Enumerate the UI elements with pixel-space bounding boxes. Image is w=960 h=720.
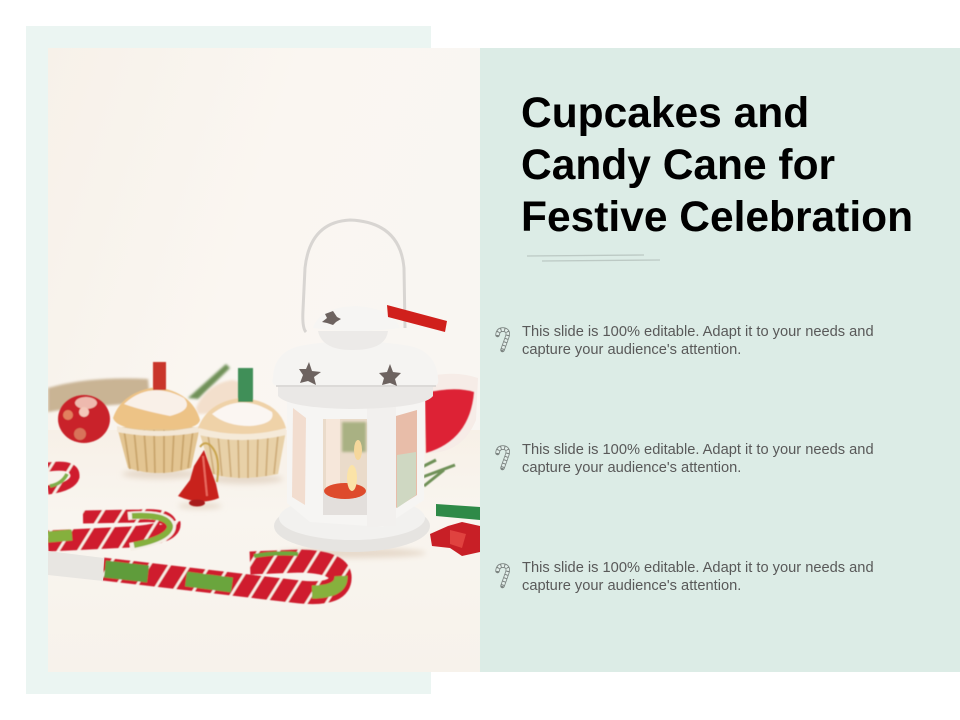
right cupcake — [198, 368, 286, 478]
lantern handle — [303, 220, 405, 332]
lantern base — [274, 500, 430, 552]
photo: lantern, cupcakes and candy canes — [48, 48, 480, 672]
red star bow — [430, 522, 480, 556]
left cupcake — [113, 362, 200, 473]
title — [521, 90, 913, 241]
body text: capture your audience's attention. — [522, 578, 741, 594]
star right — [379, 364, 401, 386]
body text — [522, 560, 874, 594]
icon: candy cane — [495, 563, 510, 588]
title: Cupcakes and — [521, 90, 809, 137]
red bauble — [58, 395, 110, 443]
body text: This slide is 100% editable. Adapt it to your needs and — [522, 442, 874, 458]
red tree ornament — [178, 443, 219, 506]
body text — [522, 442, 874, 476]
lantern lower cap — [278, 384, 433, 409]
star left — [299, 362, 321, 385]
icon: candy cane — [495, 445, 510, 470]
photo table surface — [48, 430, 480, 672]
green sprig by lantern — [420, 460, 455, 486]
photo background wall — [48, 48, 480, 448]
red clothespin — [387, 305, 447, 332]
candy wrapper label — [48, 551, 104, 581]
text item 1 — [495, 324, 874, 358]
lantern — [272, 220, 447, 552]
title: Candy Cane for — [521, 142, 835, 189]
icon: candy cane — [495, 327, 510, 352]
rear blurred cupcake — [196, 380, 250, 414]
lantern top cap — [313, 306, 400, 350]
text item 2 — [495, 442, 874, 476]
text item 3 — [495, 560, 874, 594]
candle — [324, 483, 366, 499]
left window — [292, 408, 306, 505]
red drink glass — [425, 374, 478, 453]
body text — [522, 324, 874, 358]
twine — [48, 378, 150, 412]
panel: pale backing block — [26, 26, 431, 694]
title underline strokes — [527, 254, 660, 262]
center window — [323, 419, 367, 515]
candy cane: long front — [103, 553, 341, 593]
lantern dome — [272, 341, 438, 387]
green clothespin — [436, 504, 480, 520]
table shadows — [122, 469, 426, 558]
green sprig — [188, 364, 230, 399]
body text: capture your audience's attention. — [522, 460, 741, 476]
candy cane: middle — [48, 515, 172, 547]
lantern body — [287, 400, 425, 527]
body text: This slide is 100% editable. Adapt it to your needs and — [522, 560, 874, 576]
body text: This slide is 100% editable. Adapt it to your needs and — [522, 324, 874, 340]
panel: text background — [480, 48, 960, 672]
body text: capture your audience's attention. — [522, 342, 741, 358]
right window — [396, 410, 417, 508]
title: Festive Celebration — [521, 194, 913, 241]
candy cane: left edge piece — [48, 466, 75, 490]
small star — [322, 311, 341, 325]
